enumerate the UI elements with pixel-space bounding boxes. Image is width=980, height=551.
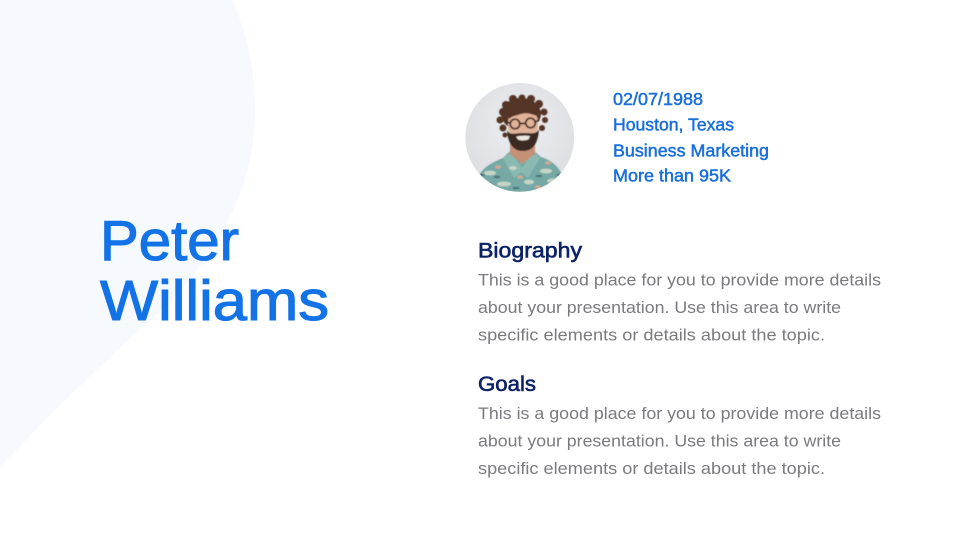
- info list: [613, 89, 769, 186]
- biography heading: Biography: [478, 240, 583, 262]
- background blob shape: [0, 0, 255, 467]
- goals body text: about your presentation. Use this area to write: [478, 431, 841, 450]
- shirt: [480, 151, 562, 192]
- beard: [507, 129, 539, 151]
- hair: [496, 94, 548, 138]
- fringe: [508, 108, 538, 119]
- portrait photo: [465, 83, 575, 193]
- face: [507, 112, 539, 134]
- biography body text: about your presentation. Use this area to write: [478, 298, 841, 317]
- glasses: [506, 118, 539, 129]
- title: Peter Williams: Williams: [100, 269, 329, 333]
- smile: [516, 136, 530, 140]
- biography body text: This is a good place for you to provide more details: [478, 271, 881, 290]
- info list: 02/07/1988: [613, 89, 703, 109]
- info list: Business Marketing: [613, 140, 769, 160]
- biography body text: [478, 271, 881, 344]
- title: Peter Williams: [100, 209, 329, 333]
- biography section: [478, 240, 881, 344]
- goals body text: [478, 404, 881, 478]
- goals body text: specific elements or details about the topic.: [478, 459, 825, 478]
- goals heading: Goals: [478, 373, 536, 396]
- biography body text: specific elements or details about the topic.: [478, 326, 825, 344]
- goals section: [478, 373, 881, 478]
- neck: [510, 144, 535, 164]
- goals body text: This is a good place for you to provide more details: [478, 404, 881, 423]
- info list: More than 95K: [613, 166, 731, 186]
- title: Peter Williams: Peter: [100, 209, 239, 273]
- info list: Houston, Texas: [613, 115, 734, 135]
